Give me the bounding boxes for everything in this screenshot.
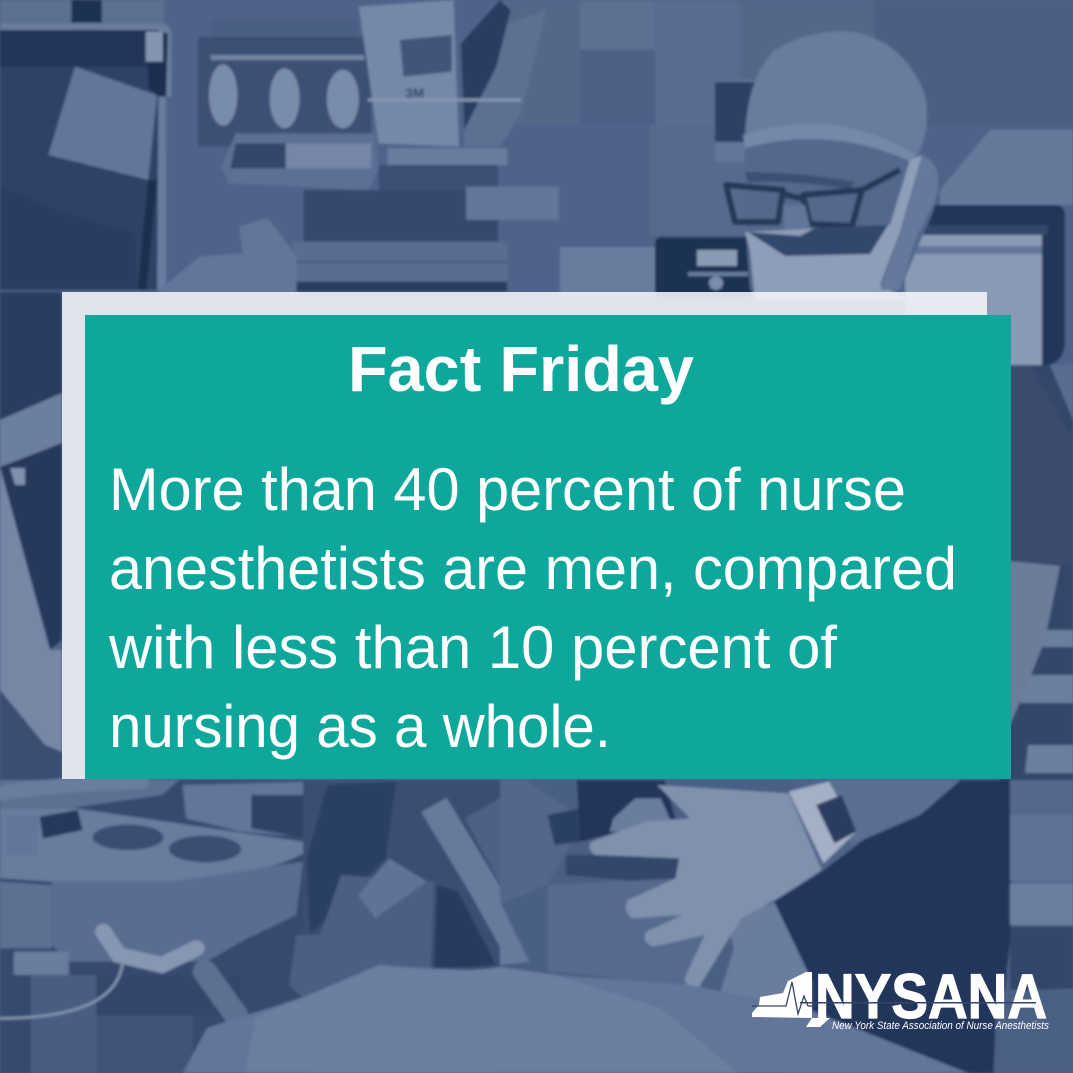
gloved hand: [589, 785, 822, 988]
patient gown: [183, 965, 968, 1073]
nurse: mask: [745, 155, 938, 300]
teal content panel: [85, 315, 1011, 779]
wall notice: [715, 80, 755, 162]
body text: nursing as a whole.: [109, 693, 611, 760]
left screen edge top: [0, 292, 62, 420]
anesthesia machine: [0, 780, 324, 1073]
NYSANA logo: [752, 962, 1049, 1032]
body text: More than 40 percent of nurse: [109, 456, 906, 523]
wall tiles: [500, 0, 1073, 235]
left monitor: [0, 0, 171, 290]
floor arm and flaps: [289, 775, 551, 998]
nurse: cap band: [743, 124, 915, 162]
wall shelf items: [940, 130, 1073, 205]
nurse: nose: [783, 205, 812, 240]
body text: with less than 10 percent of: [108, 614, 837, 681]
nurse: face: [745, 135, 938, 290]
body text: anesthetists are men, compared: [109, 535, 957, 602]
logo: heartbeat line: [752, 982, 816, 1014]
translucent white backing panel: [62, 292, 987, 779]
nurse: glasses: [726, 170, 900, 226]
telephone: [655, 237, 752, 297]
hoses: [0, 782, 236, 1018]
logo: tagline: New York State Association of Nurse Anesthetists: [832, 1020, 1049, 1032]
nurse: brow shadow: [745, 172, 855, 190]
glove dispenser rack and supplies: [159, 0, 559, 293]
glove dispenser rack and supplies: 3M: [405, 86, 424, 100]
right computer monitor: [905, 205, 1065, 365]
patient area: [500, 780, 814, 1073]
patient blanket: [245, 965, 738, 1073]
right side: sleeve, arm and shelves: [1000, 365, 1073, 795]
body text: [108, 456, 957, 760]
paper on wall: [560, 247, 655, 297]
nurse: surgical cap: [745, 31, 927, 160]
smartwatch: [789, 782, 856, 863]
logo: New York State silhouette: [752, 972, 830, 1027]
logo: stripe through wordmark: [800, 1002, 1036, 1004]
heading: Fact Friday: [348, 333, 694, 405]
nurse torso and arm: [774, 780, 1073, 1073]
left side medical monitor: [0, 393, 62, 785]
